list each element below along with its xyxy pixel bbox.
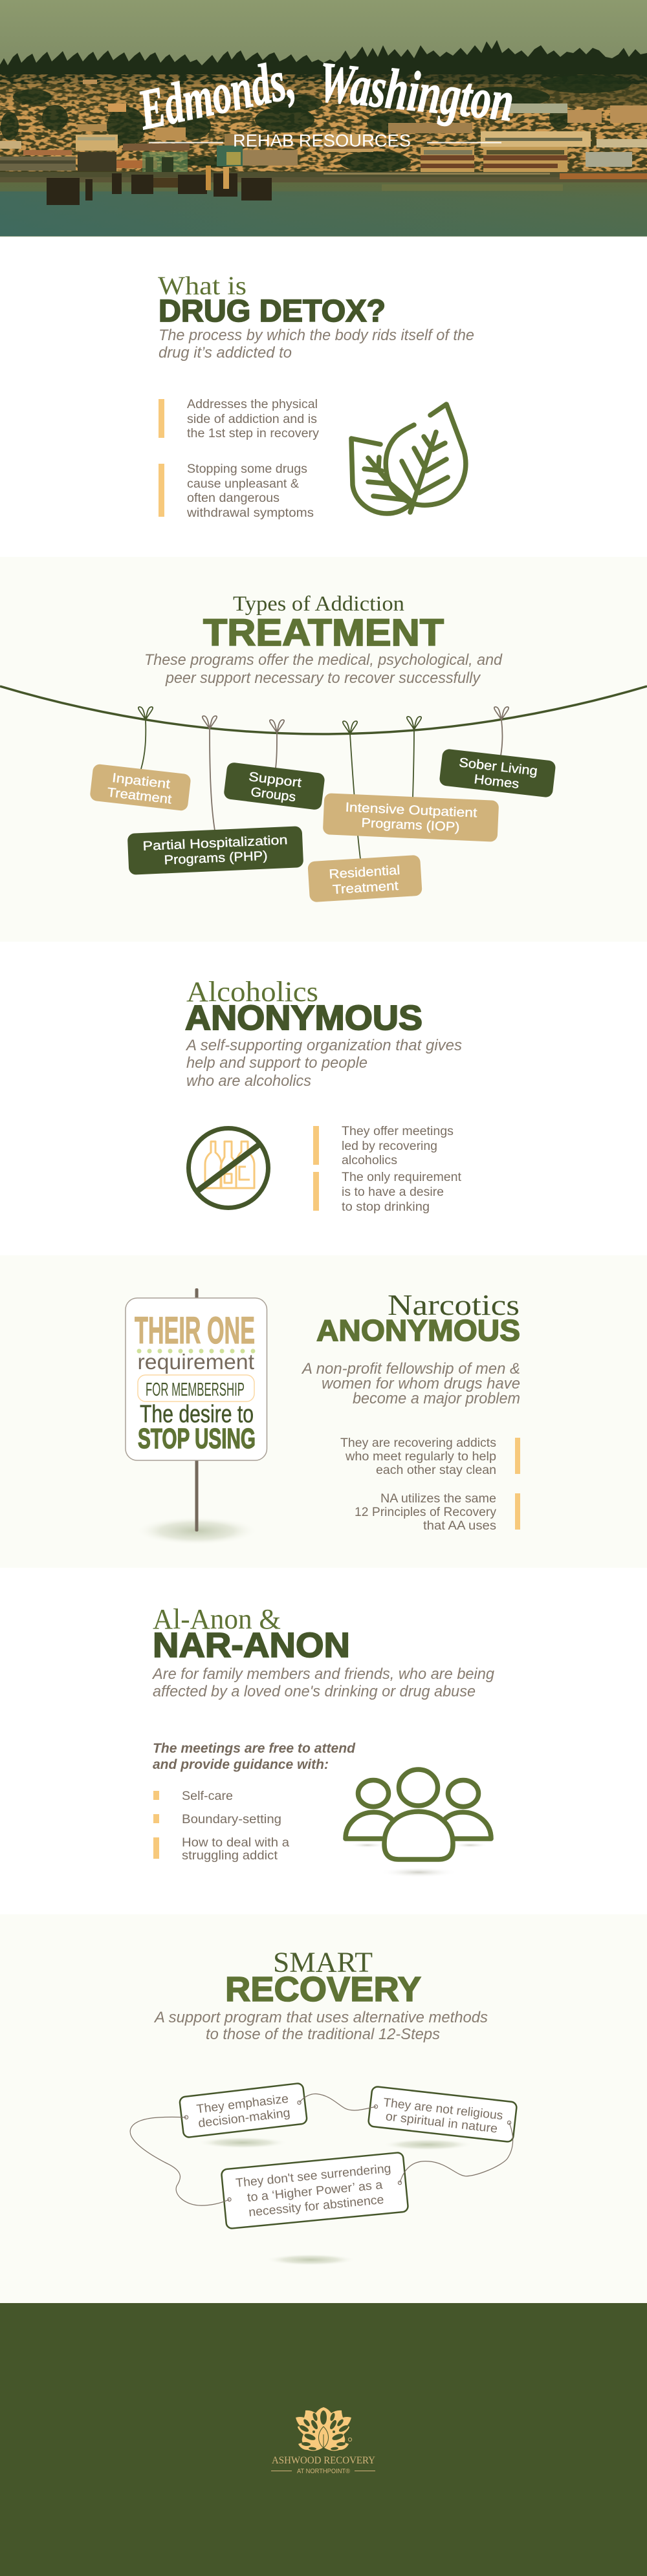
tag: higher power	[221, 2152, 408, 2229]
heading: smart recovery: SMART	[273, 1947, 373, 1978]
text: smart description	[153, 2009, 488, 2043]
tag: inpatient treatment: Treatment	[106, 785, 173, 807]
tag: intensive outpatient programs	[323, 793, 499, 842]
bullet: withdrawal: cause unpleasant &	[187, 477, 299, 491]
tag: partial hospitalization programs	[127, 826, 303, 875]
signpost: FOR MEMBERSHIP	[146, 1380, 245, 1400]
bullet: 12 principles: 12 Principles of Recovery	[355, 1506, 496, 1519]
heading: narcotics anonymous: ANONYMOUS	[316, 1314, 520, 1347]
heading: alcoholics anonymous: Alcoholics	[186, 976, 318, 1008]
text: programs description	[144, 651, 503, 687]
bullet: withdrawal	[159, 462, 314, 520]
hanging strings and bows	[138, 707, 509, 859]
tag: support groups: Support	[248, 770, 303, 790]
bullet: requirement: to stop drinking	[342, 1200, 430, 1214]
bullet: self-care	[153, 1790, 233, 1803]
bullet: struggling addict	[153, 1836, 289, 1863]
tag: support groups: Groups	[250, 785, 296, 805]
text: definition	[159, 327, 474, 362]
icon: no alcohol	[189, 1128, 268, 1208]
panel: alcoholics anonymous	[0, 942, 647, 1255]
hillside houses texture	[0, 74, 647, 171]
tag: intensive outpatient programs: Intensive Outpatient	[345, 801, 477, 820]
subtitle: rehab resources: REHAB RESOURCES	[233, 131, 411, 150]
tag: sober living homes: Sober Living	[458, 755, 538, 779]
bullet: withdrawal: often dangerous	[187, 492, 280, 505]
heading: al-anon nar-anon: NAR-ANON	[153, 1626, 350, 1665]
text: al-anon description	[151, 1665, 495, 1700]
bullet: meetings: led by recovering	[342, 1140, 437, 1153]
title: Washington	[316, 50, 516, 133]
text: AA description: help and support to people	[186, 1054, 367, 1072]
title	[133, 48, 516, 142]
panel: what is drug detox	[0, 237, 647, 557]
text: al-anon description: affected by a loved one's drinking or drug abuse	[153, 1683, 476, 1700]
tag: higher power: They don't see surrendering	[235, 2162, 391, 2191]
heading: types of addiction treatment: Types of Addiction	[233, 592, 404, 616]
panel: al-anon and nar-anon	[0, 1568, 647, 1914]
text: NA description	[301, 1360, 520, 1407]
heading: alcoholics anonymous: ANONYMOUS	[185, 999, 422, 1037]
tag: decision-making: decision-making	[197, 2106, 291, 2130]
bullet: meetings	[313, 1125, 454, 1167]
text: NA description: women for whom drugs have	[322, 1375, 520, 1392]
heading: smart recovery: RECOVERY	[225, 1970, 421, 2009]
tag: not religious: They are not religious	[382, 2096, 503, 2123]
tag: higher power: necessity for abstinence	[248, 2193, 384, 2220]
text: AA description: who are alcoholics	[186, 1072, 311, 1090]
tag: intensive outpatient programs: Programs (IOP)	[361, 816, 460, 834]
logo: ashwood recovery	[271, 2407, 375, 2475]
heading: types of addiction treatment: TREATMENT	[203, 612, 444, 654]
panel: types of addiction treatment	[0, 557, 647, 942]
bullet: physical side: side of addiction and is	[187, 413, 317, 426]
text: NA description: A non-profit fellowship of men &	[301, 1360, 520, 1378]
heading: narcotics anonymous	[316, 1288, 520, 1347]
text: meetings intro: The meetings are free to attend	[153, 1741, 356, 1756]
bullet: withdrawal: withdrawal symptoms	[186, 506, 314, 520]
heading: alcoholics anonymous	[185, 976, 422, 1037]
text: al-anon description: Are for family members and friends, who are being	[151, 1665, 495, 1683]
bullet: requirement: is to have a desire	[342, 1185, 444, 1199]
heading: types of addiction treatment	[203, 592, 444, 654]
bullet: 12 principles	[355, 1492, 520, 1533]
bullet: physical side: the 1st step in recovery	[187, 427, 320, 440]
signpost: THEIR ONE	[135, 1310, 255, 1352]
bullet: 12 principles: that AA uses	[423, 1519, 496, 1533]
bullet: struggling addict: How to deal with a	[182, 1836, 289, 1850]
icon: group of people	[345, 1770, 491, 1878]
tag: inpatient treatment: Inpatient	[111, 771, 171, 792]
waterfront buildings	[0, 80, 647, 175]
signpost	[126, 1288, 267, 1545]
panel: footer	[0, 2303, 647, 2576]
logo: ashwood recovery: ASHWOOD RECOVERY	[272, 2455, 375, 2466]
text: AA description: A self-supporting organization that gives	[185, 1037, 462, 1054]
bullet: physical side: Addresses the physical	[187, 398, 318, 411]
signpost: The desire to	[140, 1401, 254, 1428]
tag: decision-making	[179, 2083, 307, 2138]
heading: al-anon nar-anon	[153, 1603, 350, 1665]
panel: smart recovery	[0, 1914, 647, 2303]
connecting strings	[130, 2094, 513, 2205]
trees on hill	[1, 75, 631, 172]
panel: narcotics anonymous	[0, 1255, 647, 1568]
rope	[0, 686, 647, 734]
water	[0, 182, 647, 236]
forest treeline	[0, 40, 647, 188]
ferry pilings	[47, 173, 272, 205]
tag: sober living homes	[439, 748, 556, 798]
text: NA description: become a major problem	[353, 1390, 520, 1407]
text: definition: drug it’s addicted to	[159, 344, 292, 362]
tag: residential treatment: Treatment	[332, 879, 399, 897]
text: programs description: These programs offer the medical, psychological, and	[144, 651, 503, 669]
icon: leaves	[351, 404, 466, 514]
bullet: meetings: They offer meetings	[342, 1125, 454, 1138]
tag: inpatient treatment	[89, 764, 192, 811]
title: Edmonds,	[133, 48, 300, 142]
tag: support groups	[223, 762, 325, 810]
bullet: struggling addict: struggling addict	[182, 1849, 278, 1863]
tag: residential treatment	[307, 855, 422, 902]
bullet: recovering addicts: They are recovering addicts	[340, 1436, 496, 1450]
bullet: recovering addicts: who meet regularly to help	[345, 1450, 496, 1464]
tag: not religious: or spiritual in nature	[385, 2110, 498, 2136]
heading: al-anon nar-anon: Al-Anon &	[153, 1603, 281, 1635]
shoreline	[0, 172, 647, 177]
bullet: physical side	[159, 398, 320, 440]
heading: what is drug detox: DRUG DETOX?	[159, 294, 386, 329]
heading: smart recovery	[225, 1947, 421, 2009]
heading: what is drug detox	[158, 271, 386, 329]
bullet: recovering addicts	[340, 1436, 520, 1477]
text: meetings intro	[153, 1741, 356, 1772]
text: meetings intro: and provide guidance with:	[153, 1757, 329, 1772]
bullet: meetings: alcoholics	[342, 1154, 397, 1167]
bullet: boundary-setting: Boundary-setting	[182, 1813, 281, 1826]
tag: partial hospitalization programs: Partial Hospitalization	[142, 833, 288, 854]
bullet: recovering addicts: each other stay clean	[376, 1464, 496, 1477]
tag: partial hospitalization programs: Programs (PHP)	[164, 849, 268, 867]
text: programs description: peer support necessary to recover successfully	[165, 669, 481, 687]
text: AA description	[185, 1037, 462, 1090]
heading: what is drug detox: What is	[158, 271, 247, 300]
bullet: self-care: Self-care	[182, 1790, 233, 1803]
bullet: requirement: The only requirement	[342, 1171, 462, 1184]
tag: sober living homes: Homes	[473, 772, 520, 792]
bullet: 12 principles: NA utilizes the same	[380, 1492, 496, 1506]
panel: hero photo banner	[0, 0, 647, 237]
tag: higher power: to a ‘Higher Power’ as a	[247, 2178, 384, 2205]
bullet: requirement	[313, 1171, 462, 1214]
bullet: withdrawal: Stopping some drugs	[187, 462, 307, 476]
text: definition: The process by which the body rids itself of the	[159, 327, 474, 344]
tag: residential treatment: Residential	[329, 863, 400, 882]
logo: ashwood recovery: AT NORTHPOINT®	[297, 2467, 350, 2475]
text: smart description: A support program that uses alternative methods	[153, 2009, 488, 2026]
signpost: STOP USING	[138, 1423, 256, 1455]
tag shadows	[197, 2137, 473, 2266]
signpost: requirement	[137, 1350, 254, 1374]
tag: decision-making: They emphasize	[196, 2092, 289, 2116]
tag: not religious	[368, 2086, 517, 2142]
heading: narcotics anonymous: Narcotics	[388, 1288, 520, 1321]
text: smart description: to those of the traditional 12-Steps	[206, 2026, 440, 2043]
